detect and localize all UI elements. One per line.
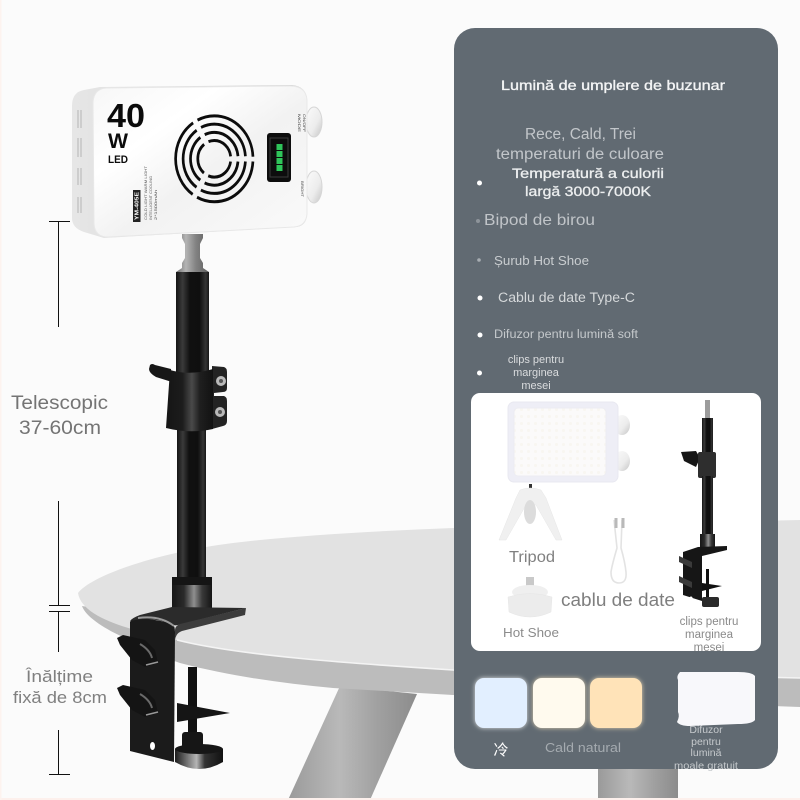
spec text: INTELLIGENT COOLING: [148, 176, 153, 220]
list item: edge clip: clips pentru: [508, 354, 564, 366]
cable label: cablu de date: [561, 590, 675, 610]
left edge tint: [0, 0, 2, 800]
spec text: 2*1500mAh: [153, 190, 158, 220]
list item: edge clip: marginea: [513, 367, 560, 379]
feature: colour temperatures: Rece, Cald, Trei: [525, 126, 636, 143]
edge clip label: [680, 616, 738, 654]
mini stand: [679, 400, 727, 607]
clamp sleeve: [166, 369, 213, 431]
pressure plate: [177, 703, 230, 722]
swatch: cold: [475, 678, 527, 728]
tripod label: Tripod: [509, 549, 555, 566]
list item: bipod: Bipod de birou: [484, 212, 595, 229]
swatch caption: warm natural: Cald natural: [545, 740, 621, 755]
list item: cable: Cablu de date Type-C: [498, 290, 635, 305]
battery display: [267, 133, 291, 182]
list item: diffuser: Difuzor pentru lumină soft: [494, 329, 639, 341]
swatch: warm: [590, 678, 642, 728]
wing knob upper: [117, 635, 158, 667]
mini light panel: [508, 402, 630, 482]
mounting hole: [150, 742, 155, 750]
label: telescopic range: [11, 393, 108, 439]
telescopic stand: [117, 234, 246, 769]
tripod: [499, 484, 562, 540]
knob captions: MODE: [297, 114, 302, 132]
list item: edge clip: mesei: [521, 380, 551, 392]
wing knob lower: [117, 685, 158, 717]
lower tube: [177, 425, 206, 580]
hot shoe adapter: [508, 577, 552, 617]
knob captions: BRIGHT: [300, 181, 305, 198]
screw heads: [216, 376, 226, 386]
clamp front lip: [175, 608, 246, 640]
front face: [93, 86, 307, 237]
power rating: 40: [107, 97, 145, 134]
panel background: [454, 28, 778, 769]
usb cable: [611, 518, 626, 583]
height ruler: [49, 221, 70, 774]
table leg: rear: [598, 760, 678, 800]
cooling vent rings: [176, 116, 253, 202]
clamp foot: [175, 732, 223, 769]
edge clip label: clips pentru: [680, 616, 738, 628]
table edge: [82, 606, 800, 707]
diffuser caption: pentru: [691, 736, 721, 748]
c-clamp: [117, 607, 246, 769]
list bullets: [476, 180, 482, 376]
diffuser caption: moale gratuit: [674, 760, 738, 772]
model tag: [133, 190, 141, 222]
table leg: front: [288, 686, 417, 800]
list item: edge clip: [508, 354, 564, 392]
swatch: natural: [533, 678, 585, 728]
pocket light: [72, 85, 322, 238]
feature: wide colour range: [512, 166, 664, 199]
feature: colour temperatures: temperaturi de culoare: [496, 146, 664, 163]
table: [78, 520, 800, 800]
power rating: LED: [108, 154, 128, 166]
clamp body: [130, 617, 175, 762]
list item: hot shoe: Șurub Hot Shoe: [494, 254, 589, 268]
model tag: YM-405E: [135, 192, 141, 220]
hot shoe label: Hot Shoe: [503, 625, 559, 640]
panel: product details: [454, 28, 778, 772]
light body: [72, 85, 307, 238]
base collar: [172, 577, 212, 613]
edge clip label: marginea: [685, 629, 734, 641]
power rating: [107, 97, 145, 166]
side vents: [78, 110, 81, 213]
upper tube: [176, 272, 209, 377]
diffuser pouch: [677, 672, 755, 726]
clamp ears: [212, 366, 227, 429]
table top: [78, 520, 800, 678]
label: telescopic range: 37-60cm: [19, 418, 101, 439]
feature: colour temperatures: [496, 126, 664, 163]
edge clip label: mesei: [694, 642, 724, 654]
knob captions: [297, 114, 307, 198]
clamp top plate: [130, 607, 246, 625]
collar clamp: [149, 364, 227, 431]
swatch caption: cold: 冷: [493, 742, 509, 759]
diffuser caption: [674, 724, 738, 772]
label: fixed height: [13, 667, 107, 707]
table lip: [177, 640, 800, 678]
power rating: W: [108, 130, 128, 153]
threaded screw: [188, 667, 197, 737]
label: fixed height: fixă de 8cm: [13, 688, 107, 707]
locking knob: [149, 364, 172, 382]
spec text: COLD LIGHT WARM LIGHT: [143, 165, 148, 220]
feature: wide colour range: largă 3000-7000K: [525, 184, 651, 199]
panel: package contents: [471, 393, 761, 654]
bottom edge tint: [0, 798, 800, 800]
knob captions: ON/OFF: [302, 114, 307, 133]
clamp highlight: [138, 617, 174, 626]
diffuser caption: lumină: [691, 747, 722, 759]
feature: wide colour range: Temperatură a culorii: [512, 166, 664, 181]
spec text: [143, 165, 158, 220]
control knobs: [306, 107, 322, 203]
label: telescopic range: Telescopic: [11, 393, 108, 414]
label: fixed height: Înălțime: [25, 667, 93, 686]
diffuser caption: Difuzor: [689, 724, 723, 736]
silver stud: [176, 234, 209, 272]
panel heading: Lumină de umplere de buzunar: [501, 77, 725, 93]
